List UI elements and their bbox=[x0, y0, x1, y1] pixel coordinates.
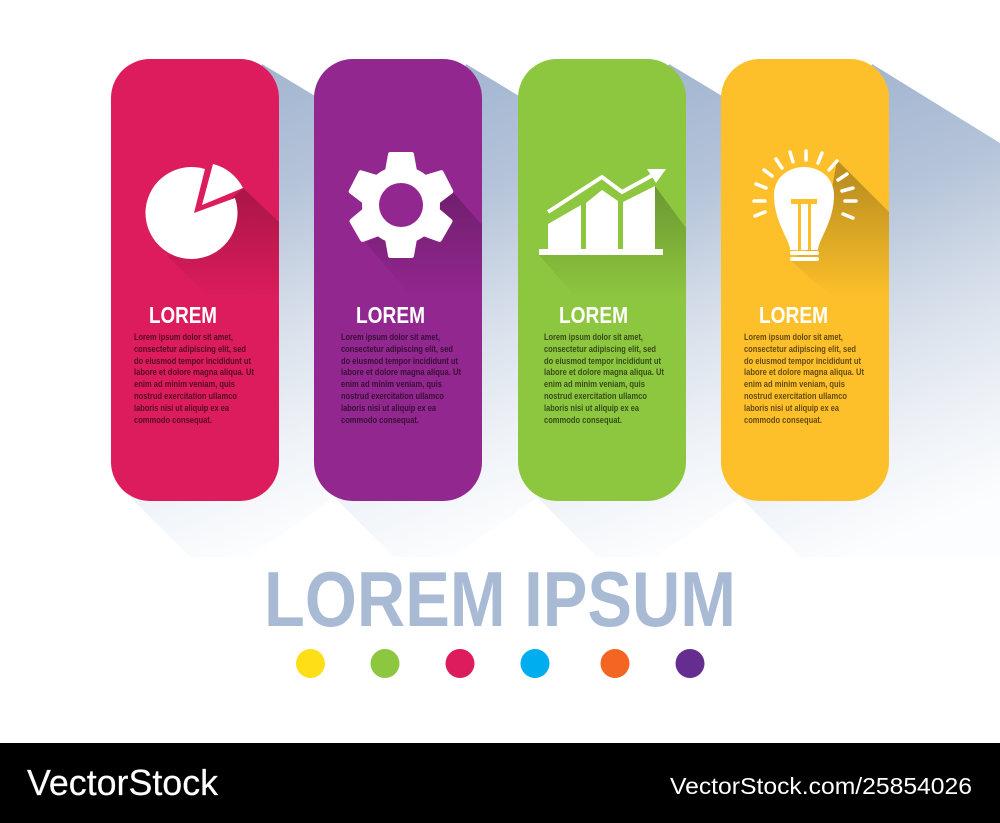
icon shadow: bulb bbox=[790, 160, 889, 297]
footer image id: VectorStock.com/25854026 bbox=[670, 773, 972, 799]
panel: yellow card bbox=[721, 59, 889, 501]
text block: green card: labore et dolore magna aliqua. Ut bbox=[544, 367, 664, 377]
icon: gear bbox=[350, 154, 452, 256]
icon shadow: chart bbox=[539, 186, 686, 300]
panel: purple card bbox=[314, 59, 482, 501]
text block: red card: enim ad minim veniam, quis bbox=[134, 379, 235, 389]
text block: purple card: Lorem ipsum dolor sit amet, bbox=[341, 332, 440, 342]
text block: yellow card: do eiusmod tempor incididunt ut bbox=[744, 356, 861, 366]
heading: purple card: LOREM bbox=[356, 302, 425, 328]
icon: pie chart bbox=[146, 164, 243, 259]
text block: green card bbox=[544, 332, 664, 425]
text block: yellow card: enim ad minim veniam, quis bbox=[744, 379, 845, 389]
text block: red card: consectetur adipiscing elit, sed bbox=[134, 344, 246, 354]
text block: yellow card: labore et dolore magna aliqua. Ut bbox=[744, 367, 864, 377]
text block: yellow card: Lorem ipsum dolor sit amet, bbox=[744, 332, 843, 342]
icon: rising bar chart bbox=[539, 169, 666, 255]
footer bar bbox=[0, 743, 1000, 823]
text block: green card: consectetur adipiscing elit, sed bbox=[544, 344, 656, 354]
text block: yellow card: laboris nisi ut aliquip ex ea bbox=[744, 403, 840, 413]
text block: red card bbox=[134, 332, 254, 425]
long shadows behind cards bbox=[130, 64, 1000, 557]
text block: purple card bbox=[341, 332, 461, 425]
text block: purple card: laboris nisi ut aliquip ex ea bbox=[341, 403, 437, 413]
text block: green card: Lorem ipsum dolor sit amet, bbox=[544, 332, 643, 342]
text block: purple card: enim ad minim veniam, quis bbox=[341, 379, 442, 389]
panel: red card bbox=[111, 59, 279, 501]
icon shadow: gear bbox=[366, 192, 482, 297]
text block: yellow card: nostrud exercitation ullamco bbox=[744, 391, 847, 401]
text block: purple card: labore et dolore magna aliqua. Ut bbox=[341, 367, 461, 377]
title: LOREM IPSUM bbox=[264, 555, 736, 643]
text block: green card: enim ad minim veniam, quis bbox=[544, 379, 645, 389]
text block: red card: nostrud exercitation ullamco bbox=[134, 391, 237, 401]
text block: green card: commodo consequat. bbox=[544, 415, 622, 425]
colour dots row bbox=[296, 649, 704, 678]
text block: purple card: commodo consequat. bbox=[341, 415, 419, 425]
text block: red card: laboris nisi ut aliquip ex ea bbox=[134, 403, 230, 413]
panel: green card bbox=[518, 59, 686, 501]
text block: red card: labore et dolore magna aliqua. Ut bbox=[134, 367, 254, 377]
text block: purple card: consectetur adipiscing elit, sed bbox=[341, 344, 453, 354]
text block: yellow card: commodo consequat. bbox=[744, 415, 822, 425]
icon: light bulb bbox=[754, 151, 856, 261]
text block: green card: do eiusmod tempor incididunt ut bbox=[544, 356, 661, 366]
text block: green card: laboris nisi ut aliquip ex ea bbox=[544, 403, 640, 413]
text block: yellow card: consectetur adipiscing elit, sed bbox=[744, 344, 856, 354]
footer logo: VectorStock bbox=[27, 762, 219, 803]
heading: red card: LOREM bbox=[149, 302, 217, 328]
text block: purple card: nostrud exercitation ullamco bbox=[341, 391, 444, 401]
icon shadow: pie bbox=[168, 188, 279, 297]
text block: red card: Lorem ipsum dolor sit amet, bbox=[134, 332, 233, 342]
text block: yellow card bbox=[744, 332, 864, 425]
text block: red card: do eiusmod tempor incididunt ut bbox=[134, 356, 251, 366]
text block: red card: commodo consequat. bbox=[134, 415, 212, 425]
heading: green card: LOREM bbox=[559, 302, 628, 328]
heading: yellow card: LOREM bbox=[759, 302, 828, 328]
text block: purple card: do eiusmod tempor incididunt ut bbox=[341, 356, 458, 366]
text block: green card: nostrud exercitation ullamco bbox=[544, 391, 647, 401]
